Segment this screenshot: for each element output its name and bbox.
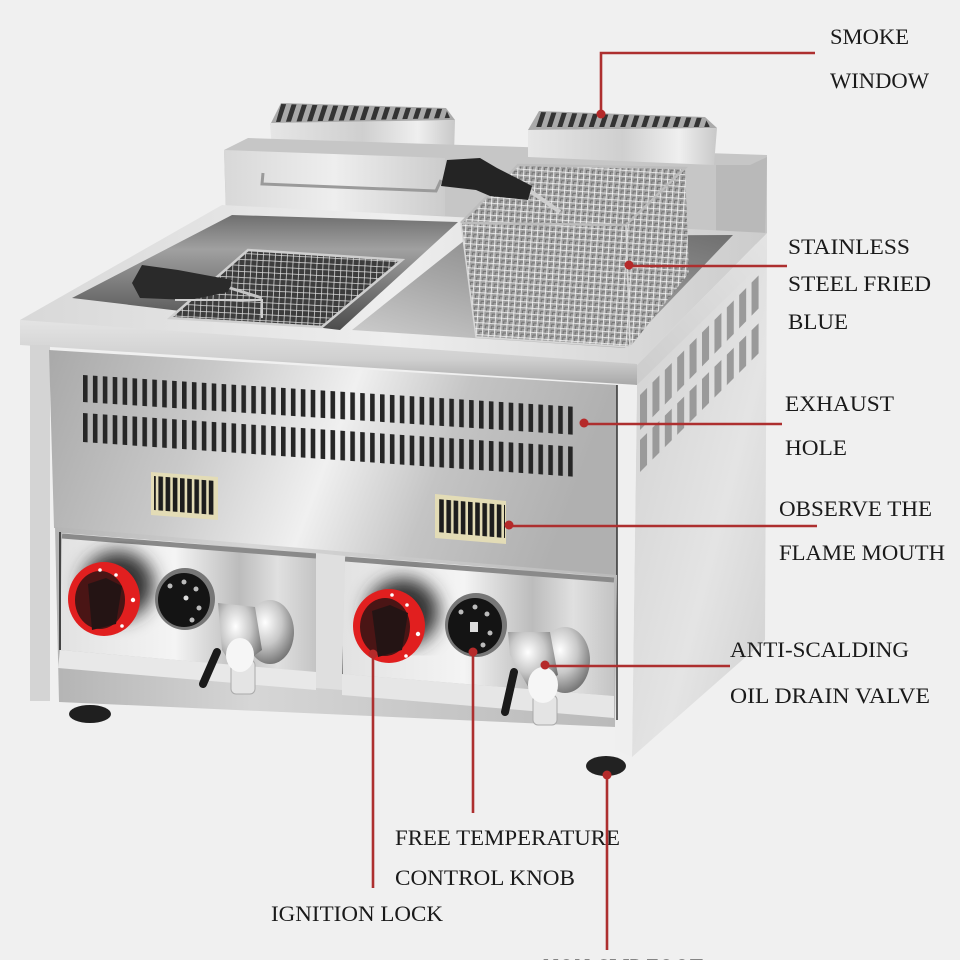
right drain valve xyxy=(505,627,590,725)
feet xyxy=(69,705,626,776)
knob shadows xyxy=(82,551,439,646)
left ignition knob xyxy=(68,562,140,636)
callout: ignition lock xyxy=(271,650,443,926)
callout: exhaust hole: EXHAUST xyxy=(785,391,895,416)
left drain valve xyxy=(203,600,294,694)
callout: stainless steel fried blue: BLUE xyxy=(788,309,848,334)
large basket xyxy=(461,165,689,347)
callout: free temperature control knob: FREE TEMPERATURE xyxy=(395,825,620,850)
callout: observe the flame mouth xyxy=(504,496,945,565)
callout: ignition lock: IGNITION LOCK xyxy=(271,901,443,926)
callout: anti-scalding oil drain valve: ANTI-SCALDING xyxy=(730,637,909,662)
callout: anti-scalding oil drain valve: OIL DRAIN VALVE xyxy=(730,683,930,708)
callout: stainless steel fried blue xyxy=(624,234,931,334)
callout: stainless steel fried blue: STAINLESS xyxy=(788,234,910,259)
front panel xyxy=(30,345,617,720)
smoke window: right xyxy=(528,111,717,165)
callout: observe the flame mouth: OBSERVE THE xyxy=(779,496,932,521)
callout: smoke window: WINDOW xyxy=(830,68,929,93)
smoke window: left xyxy=(270,103,455,156)
right temperature dial xyxy=(445,593,507,657)
fryer illustration xyxy=(20,103,767,776)
callout: exhaust hole xyxy=(580,391,895,460)
callout: stainless steel fried blue: STEEL FRIED xyxy=(788,271,931,296)
right basin xyxy=(352,235,733,348)
backsplash xyxy=(224,138,767,245)
callout: exhaust hole: HOLE xyxy=(785,435,847,460)
exhaust holes xyxy=(83,375,578,477)
callout: free temperature control knob xyxy=(395,648,620,890)
top deck xyxy=(20,205,767,385)
left basin xyxy=(72,215,458,330)
callout: anti-scalding oil drain valve xyxy=(540,637,930,708)
right ignition knob xyxy=(353,589,425,663)
right basket handle xyxy=(441,158,532,200)
callout: free temperature control knob: CONTROL KNOB xyxy=(395,865,575,890)
left basket handle xyxy=(132,265,262,318)
flame window: right xyxy=(435,494,506,544)
callout: smoke window xyxy=(596,24,929,118)
callout: smoke window: SMOKE xyxy=(830,24,909,49)
control panel xyxy=(55,527,617,727)
callout: foot xyxy=(543,770,704,960)
small basket xyxy=(170,250,402,327)
left temperature dial xyxy=(155,568,215,630)
flame window: left xyxy=(151,472,218,520)
callout: observe the flame mouth: FLAME MOUTH xyxy=(779,540,945,565)
right side panel xyxy=(615,240,767,757)
